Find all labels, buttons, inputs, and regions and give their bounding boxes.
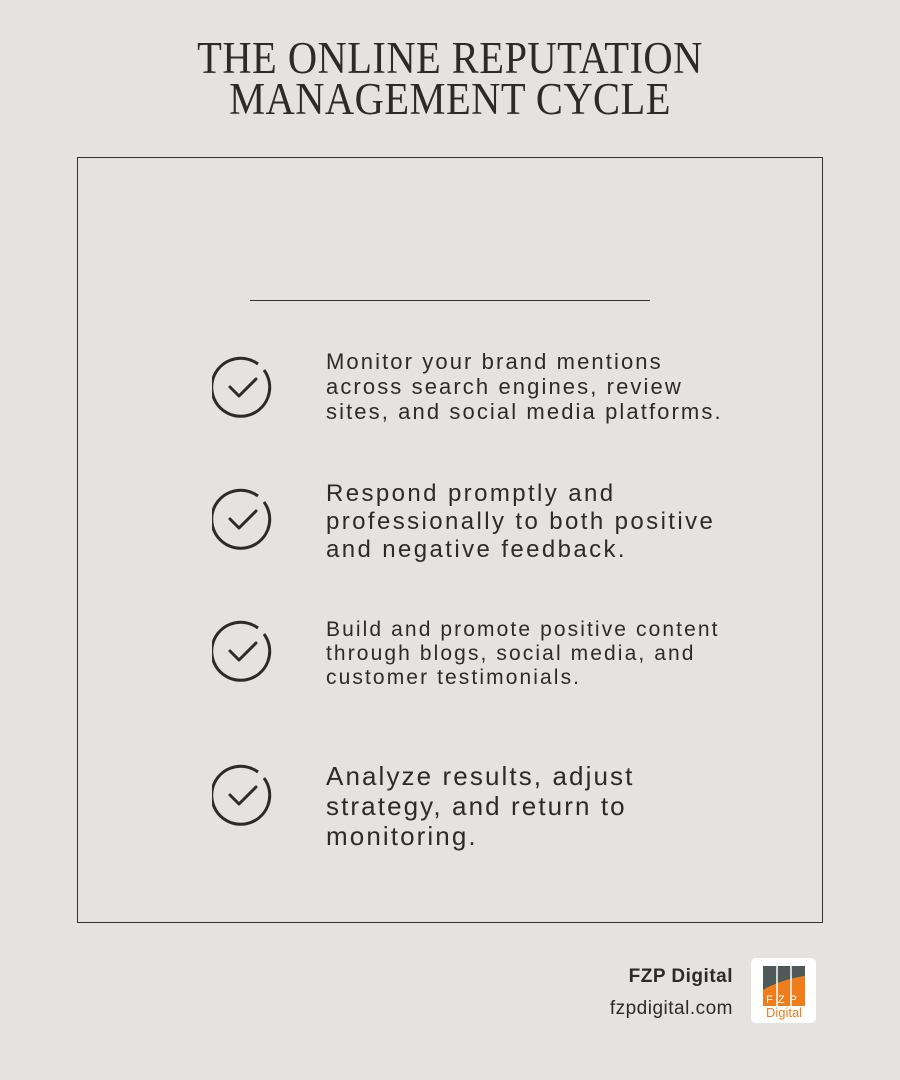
text: step 4: monitoring. <box>326 821 478 851</box>
logo <box>751 958 816 1023</box>
text: step 1 <box>326 349 723 424</box>
text: step 4 <box>326 761 634 851</box>
text: step 1: Monitor your brand mentions <box>326 349 663 374</box>
text: step 2: professionally to both positive <box>326 508 715 535</box>
text: step 3: Build and promote positive content <box>326 618 720 641</box>
text: step 1: sites, and social media platforms. <box>326 399 723 424</box>
logo: FZP <box>766 994 802 1006</box>
logo: Digital <box>766 1005 802 1020</box>
footer brand text <box>610 966 733 1019</box>
icon: check 4 <box>212 764 272 826</box>
title: MANAGEMENT CYCLE <box>229 74 671 124</box>
icon: check 2 <box>212 488 272 550</box>
title: THE ONLINE REPUTATION <box>197 33 703 83</box>
text: step 3: through blogs, social media, and <box>326 642 696 665</box>
text: step 2: Respond promptly and <box>326 480 615 507</box>
title <box>197 33 703 124</box>
text: step 3 <box>326 618 720 689</box>
text: step 2 <box>326 480 715 563</box>
text: step 4: strategy, and return to <box>326 791 627 821</box>
text: step 4: Analyze results, adjust <box>326 761 634 791</box>
text: step 2: and negative feedback. <box>326 536 627 563</box>
text: step 1: across search engines, review <box>326 374 683 399</box>
panel: steps frame <box>77 157 823 923</box>
icon: check 3 <box>212 620 272 682</box>
icon: check 1 <box>212 356 272 418</box>
footer brand text: fzpdigital.com <box>610 998 733 1019</box>
footer brand text: FZP Digital <box>629 966 733 987</box>
divider line <box>250 300 650 301</box>
text: step 3: customer testimonials. <box>326 666 581 689</box>
